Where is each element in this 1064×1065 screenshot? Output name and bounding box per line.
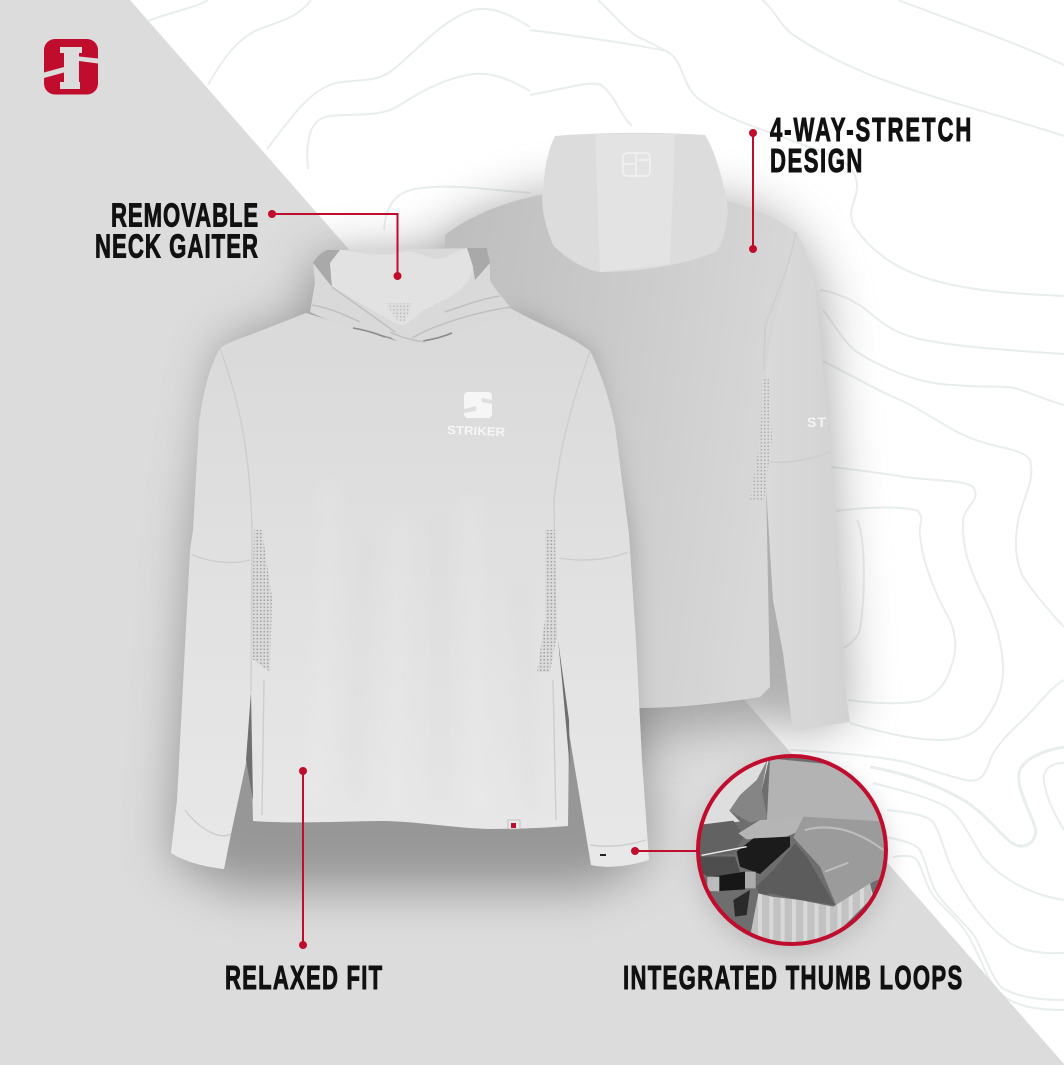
back shirt sleeve (764, 232, 850, 731)
soft shadow behind the shirts (171, 190, 850, 890)
back shirt body (445, 194, 796, 708)
label text: REMOVABLE (111, 197, 258, 235)
back sleeve print: ST (807, 414, 827, 430)
left forearm (698, 821, 744, 855)
front shirt silhouette (171, 308, 649, 869)
gaiter mesh (386, 303, 412, 322)
callout: 4-way-stretch design: DESIGN (770, 142, 862, 180)
label text: 4-WAY-STRETCH (770, 111, 971, 149)
back hood panels (595, 134, 675, 272)
soft fabric folds (318, 480, 530, 810)
sleeve fold (805, 827, 883, 872)
callout: relaxed fit (225, 767, 383, 997)
hood collar band (310, 248, 510, 345)
shadow cast on back shirt by the front shirt (510, 308, 635, 760)
back hood logo outline (623, 153, 650, 176)
back shirt side mesh (750, 378, 772, 500)
hood interior shadow left (313, 250, 340, 287)
rod line (702, 847, 747, 855)
lower-left hand (700, 856, 740, 877)
light background top-left (704, 761, 768, 824)
front shirt mesh panels (251, 530, 272, 672)
rolled sleeve (793, 817, 887, 907)
callout: integrated thumb loops (623, 847, 962, 997)
hem tag (508, 820, 520, 829)
neck gaiter (330, 248, 473, 325)
dark slits between sleeves and body (246, 640, 570, 800)
callout: 4-way-stretch design (749, 111, 971, 253)
back shirt hood (542, 133, 728, 272)
pocket fabric (751, 883, 873, 947)
thumb loop slit (600, 854, 606, 856)
leader line (302, 771, 304, 945)
reel foot (733, 890, 750, 917)
upper hand (738, 820, 800, 840)
leader line (635, 850, 698, 852)
label text: RELAXED FIT (225, 959, 383, 997)
circular detail photo of thumb loops (696, 755, 888, 954)
chest logo: STRIKER (447, 423, 506, 439)
collar fold lines (312, 287, 510, 342)
leader line (752, 133, 754, 249)
chest logo (447, 392, 506, 439)
fist (756, 843, 835, 905)
hood interior shadow right (467, 248, 490, 280)
reel body (737, 837, 790, 874)
leader line (272, 214, 398, 276)
label text: INTEGRATED THUMB LOOPS (623, 959, 962, 997)
back view shirt (445, 133, 850, 731)
back shirt sleeve seam (764, 232, 830, 462)
callout: removable neck gaiter: NECK GAITER (95, 228, 258, 266)
callout: removable neck gaiter (95, 197, 402, 280)
torso (767, 759, 880, 822)
front shirt raglan and cuff seams (185, 348, 646, 846)
shirt placket (729, 760, 767, 823)
photo ring (698, 756, 886, 944)
rod grip (708, 872, 745, 892)
logo: Striker S mark (44, 39, 98, 94)
front view shirt (171, 248, 649, 869)
